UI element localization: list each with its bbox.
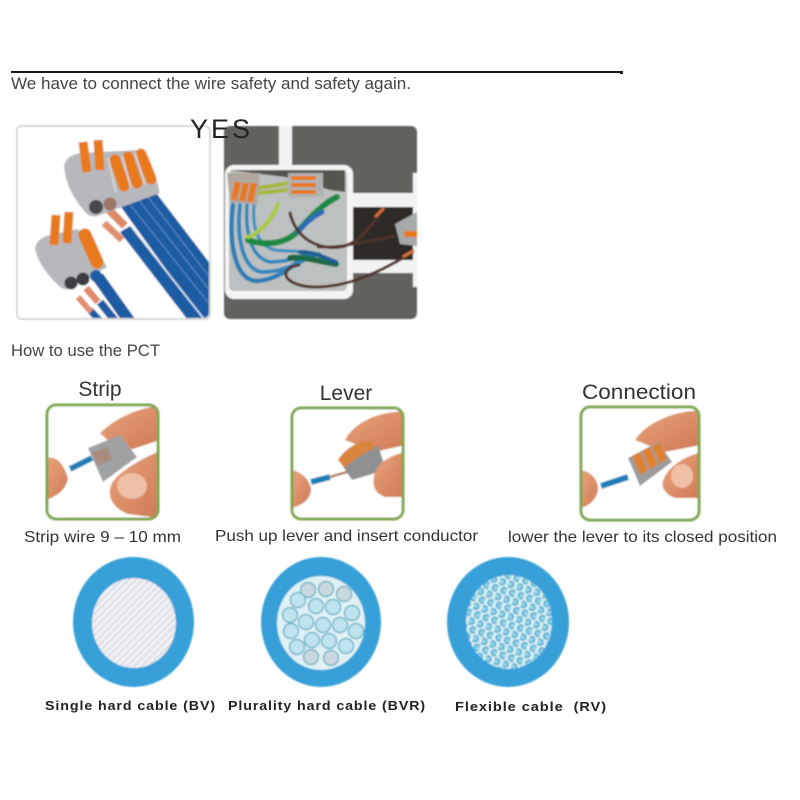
cable label: plurality: Plurality hard cable (BVR) bbox=[228, 699, 426, 713]
cable label: single: Single hard cable (BV) bbox=[45, 699, 216, 713]
cable: plurality hard bbox=[261, 557, 381, 687]
conduits bbox=[279, 126, 417, 287]
photo panel: connectors with wires bbox=[17, 126, 212, 322]
step photo: lever bbox=[292, 408, 405, 519]
connector top in box bbox=[288, 173, 323, 197]
wires: lower connector bbox=[78, 277, 130, 322]
junction box body bbox=[225, 165, 353, 299]
cable label: flexible: Flexible cable (RV) bbox=[455, 700, 607, 714]
caption: lever: Push up lever and insert conductor bbox=[215, 528, 479, 545]
photo panel: junction box bbox=[224, 126, 417, 319]
step title: Lever: Lever bbox=[320, 382, 372, 405]
connector outside box bbox=[395, 212, 417, 246]
top rule bbox=[11, 71, 623, 74]
cable: single hard bbox=[73, 557, 194, 687]
caption: strip: Strip wire 9 – 10 mm bbox=[24, 529, 181, 546]
connector: lower bbox=[35, 212, 107, 290]
step photo: connection bbox=[581, 407, 700, 520]
step title: Strip: Strip bbox=[78, 378, 122, 401]
caption: connection: lower the lever to its closed position bbox=[508, 529, 777, 546]
connector: upper bbox=[64, 140, 160, 216]
intro text: We have to connect the wire safety and safety again. bbox=[11, 74, 411, 93]
connector left in box bbox=[227, 173, 260, 205]
step photo: strip bbox=[47, 405, 160, 519]
wires: upper connector bbox=[104, 194, 212, 322]
wires in box bbox=[232, 183, 413, 287]
section heading: How to use the PCT bbox=[11, 342, 160, 360]
cable: flexible bbox=[447, 557, 569, 687]
step title: Connection: Connection bbox=[582, 381, 696, 404]
YES label: YES bbox=[190, 114, 250, 144]
